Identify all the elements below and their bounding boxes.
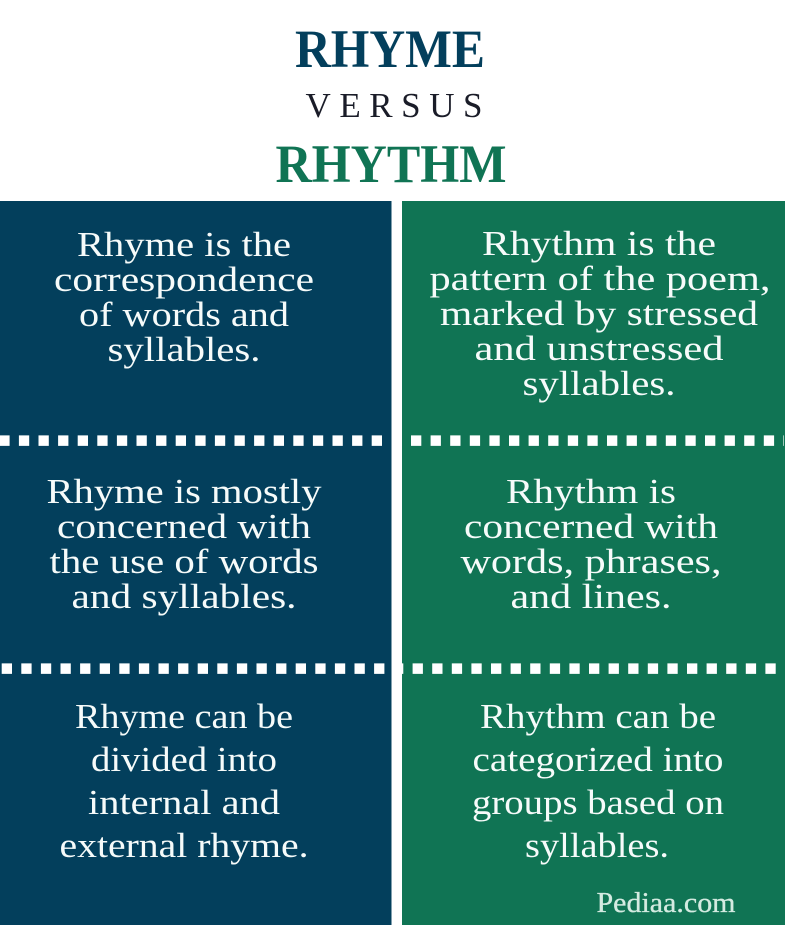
text: rhyme point 1: of words and — [79, 295, 290, 334]
divider: rhyme dotted 1 — [0, 435, 383, 446]
text: rhythm point 3: Rhythm can be — [480, 697, 716, 736]
logo: Pediaa.com: Pediaa.com — [596, 888, 736, 919]
text: rhythm point 2: and lines. — [510, 577, 672, 616]
text: rhyme point 3: external rhyme. — [60, 826, 308, 865]
text: rhyme point 1 — [54, 225, 314, 369]
heading: versus: VERSUS — [306, 86, 482, 125]
text: rhyme point 3: internal and — [88, 783, 281, 822]
text: rhythm point 3: groups based on — [472, 783, 724, 822]
text: rhythm point 1: marked by stressed — [440, 294, 759, 333]
text: rhythm point 1: pattern of the poem, — [430, 259, 770, 298]
divider: rhythm dotted 1 — [411, 435, 784, 446]
text: rhyme point 3: Rhyme can be — [75, 697, 293, 736]
panel: rhyme — [0, 201, 392, 925]
text: rhythm point 2 — [460, 472, 722, 616]
text: rhyme point 2: the use of words — [50, 542, 318, 581]
text: rhyme point 1: correspondence — [54, 260, 314, 299]
divider: rhyme dotted 2 — [2, 663, 385, 674]
text: rhythm point 1: Rhythm is the — [482, 224, 716, 263]
heading: rhyme: RHYME — [295, 19, 485, 79]
text: rhythm point 1: and unstressed — [474, 329, 724, 368]
text: rhyme point 2 — [46, 472, 322, 616]
text: rhyme point 2: Rhyme is mostly — [46, 472, 322, 511]
text: rhythm point 1: syllables. — [522, 364, 676, 403]
text: rhythm point 3: syllables. — [525, 826, 669, 865]
heading: rhythm: RHYTHM — [276, 134, 506, 194]
panel: rhythm — [393, 201, 785, 925]
divider: rhythm dotted 2 — [393, 663, 776, 674]
text: rhythm point 1 — [430, 224, 770, 403]
text: rhythm point 2: concerned with — [464, 507, 719, 546]
text: rhythm point 2: words, phrases, — [460, 542, 722, 581]
text: rhyme point 3: divided into — [91, 740, 277, 779]
text: rhythm point 2: Rhythm is — [506, 472, 676, 511]
text: rhythm point 3 — [472, 697, 724, 865]
text: rhythm point 3: categorized into — [472, 740, 724, 779]
text: rhyme point 3 — [60, 697, 308, 865]
title — [276, 19, 506, 194]
text: rhyme point 2: and syllables. — [72, 577, 296, 616]
text: rhyme point 1: syllables. — [108, 330, 260, 369]
text: rhyme point 1: Rhyme is the — [77, 225, 291, 264]
text: rhyme point 2: concerned with — [57, 507, 312, 546]
